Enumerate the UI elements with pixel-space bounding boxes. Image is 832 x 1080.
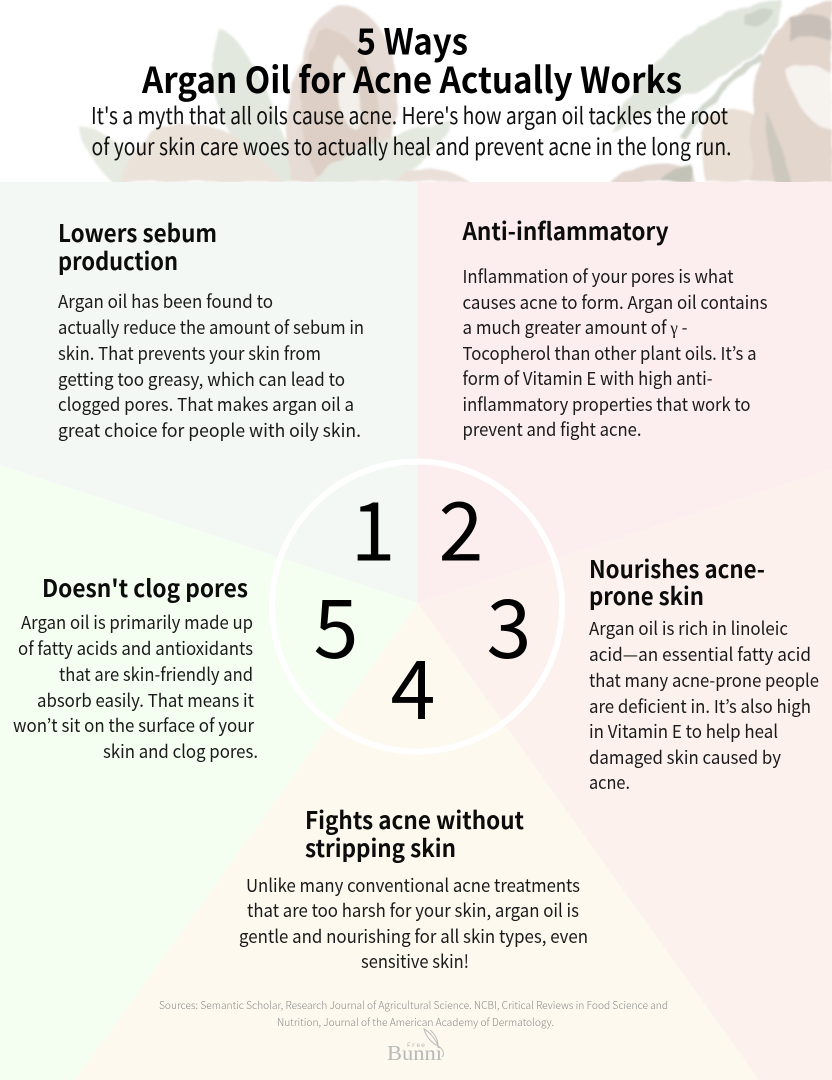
body text 2: Tocopherol than other plant oils. It’s a [462, 340, 756, 366]
panel wedge 1 background [0, 182, 418, 603]
logo: Free Bunni: Free [407, 1042, 425, 1049]
body text 2: Inflammation of your pores is what [462, 263, 734, 289]
body text 3: Argan oil is rich in linoleic [589, 615, 788, 641]
number 5: 5 [314, 565, 358, 682]
body text 5: won’t sit on the surface of your [13, 712, 255, 738]
panel wedge 3 background [418, 469, 832, 1080]
body text 1: Argan oil has been found to [58, 288, 273, 314]
body text 2 [462, 263, 768, 442]
heading 3: prone skin [589, 577, 704, 612]
title [141, 14, 682, 104]
body text 4: gentle and nourishing for all skin types, even [239, 923, 588, 949]
heading 4: Fights acne without [305, 801, 524, 836]
heading 4 [305, 801, 524, 864]
body text 4: that are too harsh for your skin, argan oil is [247, 897, 579, 923]
sources: Sources: Semantic Scholar, Research Journal of Agricultural Science. NCBI, Critical Reviews in Food Science and [159, 998, 668, 1013]
intro text: of your skin care woes to actually heal and prevent acne in the long run. [92, 128, 732, 162]
body text 3: acid—an essential fatty acid [589, 641, 811, 667]
body text 5: that are skin-friendly and [59, 661, 253, 687]
body text 3: are deficient in. It’s also high [589, 693, 811, 719]
body text 1: clogged pores. That makes argan oil a [58, 391, 354, 417]
body text 3: acne. [589, 769, 630, 795]
heading 2: Anti-inflammatory [462, 212, 669, 247]
body text 5: of fatty acids and antioxidants [18, 635, 253, 661]
logo: Free Bunni [387, 1029, 443, 1065]
panel 3: nourishes acne-prone skin [589, 550, 819, 795]
panel 1: lowers sebum production [58, 214, 364, 443]
number 1: 1 [351, 468, 395, 584]
heading 5: Doesn't clog pores [42, 569, 248, 604]
center number ring [272, 462, 562, 752]
heading 3: Nourishes acne- [589, 550, 765, 585]
number 3: 3 [487, 565, 531, 682]
body text 1: great choice for people with oily skin. [58, 417, 361, 443]
intro text [91, 97, 732, 162]
panel 4: fights acne without stripping skin [239, 801, 588, 974]
panel wedge 5 background [0, 465, 418, 1080]
panel wedge 4 background [75, 603, 759, 1080]
body text 1: skin. That prevents your skin from [58, 340, 321, 366]
header watercolor argan illustration [78, 0, 832, 182]
body text 2: form of Vitamin E with high anti- [462, 365, 712, 391]
sources [159, 998, 668, 1030]
body text 5 [13, 609, 258, 764]
body text 2: causes acne to form. Argan oil contains [462, 289, 768, 315]
body text 3: in Vitamin E to help heal [589, 718, 778, 744]
title: 5 Ways [356, 14, 468, 66]
panel 2: anti-inflammatory [462, 212, 768, 442]
body text 4: Unlike many conventional acne treatments [246, 872, 580, 898]
title: Argan Oil for Acne Actually Works [141, 52, 682, 104]
heading 3 [589, 550, 765, 612]
body text 5: absorb easily. That means it [37, 687, 254, 713]
body text 5: Argan oil is primarily made up [21, 609, 253, 635]
body text 1 [58, 288, 364, 443]
body text 3: that many acne-prone people [589, 667, 819, 693]
body text 2: inflammatory properties that work to [462, 391, 750, 417]
logo: Free Bunni: Bunni [387, 1041, 442, 1065]
panel 5: doesn't clog pores [13, 569, 258, 764]
heading 1 [58, 214, 217, 277]
number 4: 4 [391, 626, 435, 743]
body text 1: getting too greasy, which can lead to [58, 366, 345, 392]
body text 1: actually reduce the amount of sebum in [58, 314, 364, 340]
body text 4 [239, 872, 588, 974]
body text 4: sensitive skin! [361, 948, 469, 974]
panel wedge 2 background [418, 182, 832, 603]
heading 4: stripping skin [305, 829, 456, 864]
body text 3: damaged skin caused by [589, 744, 782, 770]
intro text: It's a myth that all oils cause acne. Here's how argan oil tackles the root [91, 97, 728, 131]
heading 1: Lowers sebum [58, 214, 217, 249]
body text 5: skin and clog pores. [103, 738, 258, 764]
sources: Nutrition, Journal of the American Academy of Dermatology. [277, 1015, 554, 1030]
body text 2: a much greater amount of γ - [462, 314, 688, 340]
heading 1: production [58, 242, 178, 277]
number 2: 2 [439, 468, 483, 584]
body text 2: prevent and fight acne. [462, 416, 642, 442]
body text 3 [589, 615, 819, 795]
